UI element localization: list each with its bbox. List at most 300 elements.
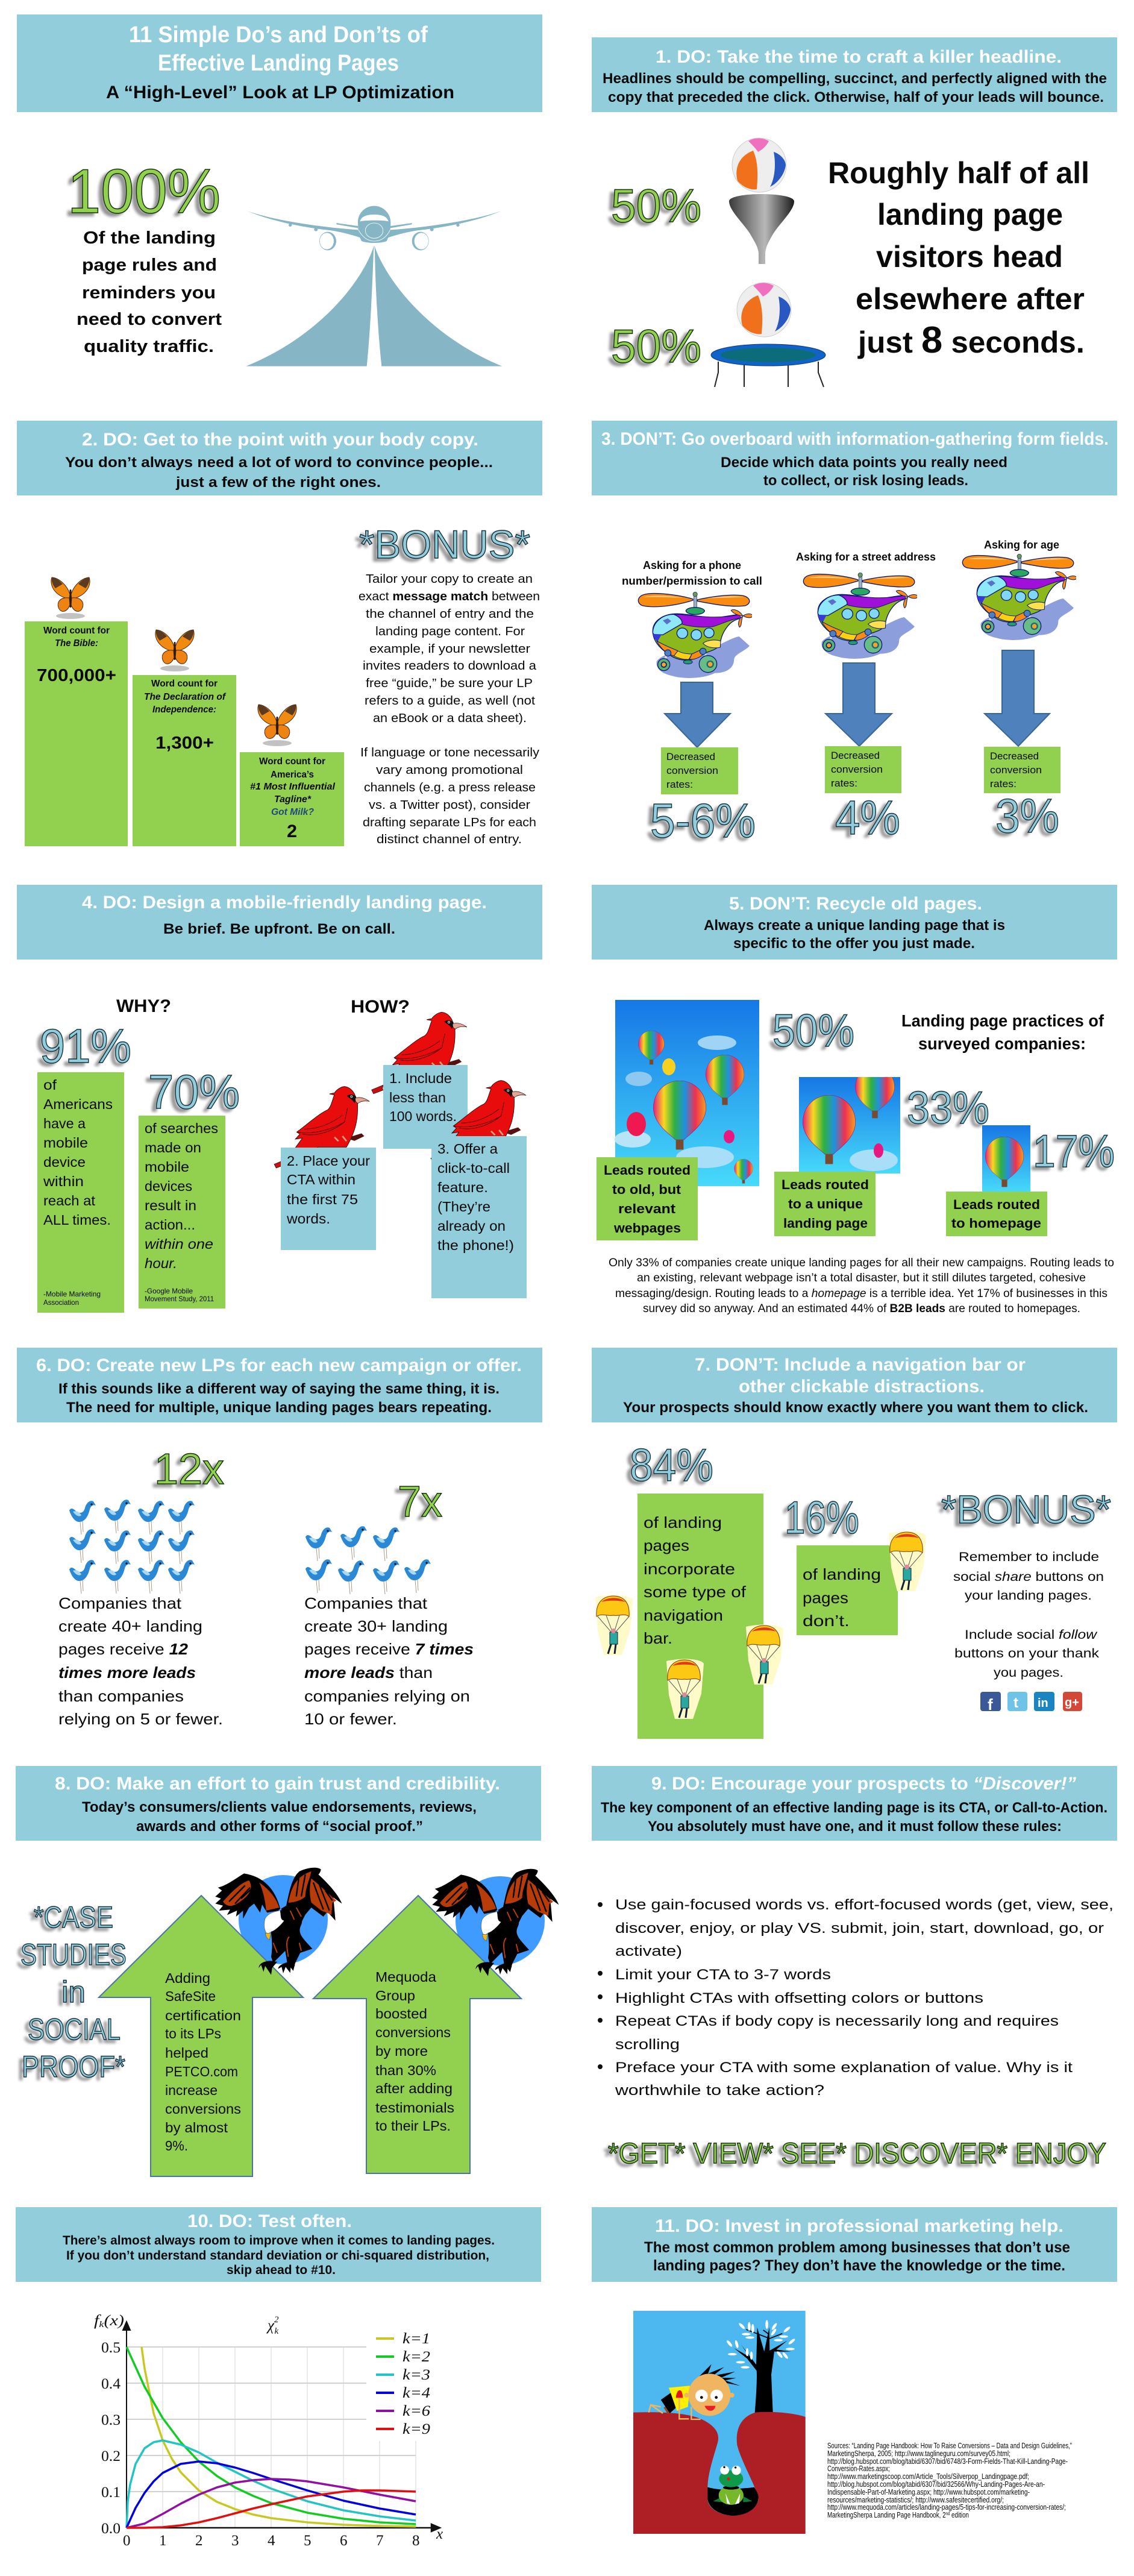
- arrow card: SafeSite: certification: [165, 2008, 241, 2023]
- bonus text: [953, 1550, 1104, 1680]
- line chart: chi-squared distribution: 8: [412, 2533, 419, 2549]
- arrow card: SafeSite: Adding: [165, 1970, 210, 1986]
- tip 2 card: CTA within: [287, 1172, 356, 1187]
- sources text: nd: [946, 2511, 950, 2516]
- heading: specific to the offer you just made.: [733, 935, 975, 952]
- intro text: quality traffic.: [84, 337, 214, 356]
- heading: [16, 1766, 541, 1841]
- bar: tagline: [240, 752, 344, 846]
- heading: The most common problem among businesses that don’t use: [644, 2239, 1070, 2256]
- column: age: rates:: [990, 778, 1017, 790]
- label: old pages: to old, but: [612, 1182, 681, 1197]
- card: 16%: don’t.: [803, 1612, 850, 1630]
- card: 84%: incorporate: [644, 1560, 735, 1578]
- icons: social buttons: [980, 1692, 1082, 1714]
- column: age: Asking for age: [984, 539, 1059, 551]
- line chart: chi-squared distribution: 3: [231, 2533, 239, 2549]
- label: homepage: [946, 1192, 1047, 1236]
- icon: cardinal 2: [274, 1087, 369, 1168]
- heading: 8. DO: Make an effort to gain trust and credibility.: [55, 1774, 500, 1794]
- heading: Today’s consumers/clients value endorsements, reviews,: [82, 1799, 477, 1815]
- card: 91% of Americans: within: [43, 1173, 84, 1189]
- bar: Declaration of Independence: Word count for: [151, 679, 218, 689]
- column: phone: [622, 559, 762, 847]
- heading: Decide which data points you really need: [721, 454, 1007, 471]
- bonus text: exact message match between: [359, 590, 540, 603]
- arrow card: Mequoda: to their LPs.: [375, 2118, 451, 2134]
- case studies heading: in: [61, 1975, 86, 2009]
- CTA rules list: Preface your CTA with some explanation of value. Why is it: [615, 2059, 1073, 2076]
- icon: cardinal 1: [372, 1012, 467, 1094]
- heading: [16, 2207, 541, 2282]
- panel: 10. test often: [16, 2207, 541, 2549]
- heading: If this sounds like a different way of saying the same thing, it is.: [58, 1381, 500, 1397]
- label: old pages: [597, 1157, 698, 1240]
- line chart: chi-squared distribution: k=1: [403, 2331, 430, 2347]
- bonus text: If language or tone necessarily: [360, 746, 539, 759]
- tip 3 card: the phone!): [437, 1237, 514, 1253]
- bar: The Bible: [25, 621, 128, 846]
- panel: 7. navigation bar: [592, 1348, 1117, 1739]
- card: 91% of Americans: -Mobile Marketing: [43, 1290, 101, 1298]
- bonus text: social share buttons on: [953, 1570, 1104, 1584]
- text: 30+ landing pages: Companies that: [304, 1594, 428, 1612]
- bonus text: your landing pages.: [965, 1589, 1092, 1603]
- tip 3 card: feature.: [437, 1180, 488, 1195]
- heading: 1. DO: Take the time to craft a killer headline.: [656, 47, 1062, 67]
- arrow card: Mequoda: testimonials: [375, 2100, 454, 2116]
- arrow card: Mequoda: after adding: [375, 2081, 453, 2096]
- bonus text: an eBook or a data sheet).: [373, 712, 527, 725]
- heading: You absolutely must have one, and it must follow these rules:: [648, 1818, 1062, 1835]
- line chart: chi-squared distribution: 0: [123, 2533, 130, 2549]
- bonus text: buttons on your thank: [954, 1647, 1100, 1660]
- tip 2 card: [281, 1148, 376, 1250]
- heading: Be brief. Be upfront. Be on call.: [163, 921, 395, 937]
- column: age: Decreased: [990, 750, 1039, 762]
- bonus heading: *BONUS*: [359, 522, 530, 567]
- card: 70% of searches: within one: [145, 1236, 213, 1252]
- stat: 50%: 50%: [772, 1005, 854, 1057]
- label: unique page: Leads routed: [782, 1177, 869, 1192]
- intro text: Of the landing: [83, 228, 216, 248]
- heading: 10. DO: Test often.: [187, 2211, 352, 2231]
- arrow card: SafeSite: PETCO.com: [165, 2064, 238, 2079]
- title banner: 11 Simple Do’s and Don’ts of: [129, 22, 428, 48]
- arrow card: SafeSite: 9%.: [165, 2138, 188, 2153]
- text: 40+ landing pages: relying on 5 or fewer.: [58, 1710, 223, 1728]
- heading: Headlines should be compelling, succinct, and perfectly aligned with the: [603, 71, 1107, 87]
- text: 40+ landing pages: [58, 1594, 223, 1728]
- bar: tagline: Word count for: [259, 756, 325, 767]
- line chart: chi-squared distribution: k=4: [403, 2385, 430, 2401]
- image: balloons medium: [799, 1067, 900, 1173]
- arrow card: Mequoda: conversions: [375, 2025, 451, 2040]
- intro text: reminders you: [82, 283, 216, 303]
- text: 30+ landing pages: create 30+ landing: [304, 1617, 448, 1635]
- icon: butterflies: [51, 577, 296, 746]
- panel: 1. killer headline: [592, 37, 1117, 387]
- icons: social buttons: g+: [1065, 1696, 1079, 1709]
- sources text: Indispensable-Part-of-Marketing.aspx; http://www.hubspot.com/marketing-: [827, 2487, 1030, 2496]
- sources text: edition: [950, 2510, 969, 2519]
- arrow card: Mequoda: by more: [375, 2043, 428, 2059]
- case studies heading: PROOF*: [22, 2050, 125, 2084]
- bonus text: landing page content. For: [375, 625, 525, 638]
- bar: tagline: Got Milk?: [271, 807, 314, 817]
- icon: parachutes: [595, 1531, 926, 1719]
- heading: The key component of an effective landing page is its CTA, or Call-to-Action.: [601, 1800, 1107, 1816]
- panel: 11. professional help: [592, 2207, 1117, 2534]
- column: street address: rates:: [831, 778, 857, 789]
- heading: The need for multiple, unique landing pages bears repeating.: [66, 1400, 492, 1416]
- heading: [592, 37, 1117, 112]
- bar: The Bible: Word count for: [43, 626, 110, 636]
- card: 70% of searches: mobile: [145, 1159, 189, 1175]
- text: 30+ landing pages: companies relying on: [304, 1687, 470, 1705]
- image: balloons small: [982, 1125, 1030, 1192]
- line chart: chi-squared distribution: 5: [304, 2533, 311, 2549]
- bar: Declaration of Independence: [133, 675, 236, 846]
- card: 84%: [637, 1494, 763, 1739]
- label: unique page: to a unique: [788, 1196, 863, 1211]
- line chart: chi-squared distribution: k=9: [403, 2421, 431, 2437]
- heading: just a few of the right ones.: [175, 474, 381, 491]
- stat: 84%: 84%: [630, 1440, 713, 1491]
- panel: title and 100% intro: [17, 14, 542, 366]
- bar: Declaration of Independence: Independence:: [152, 705, 216, 715]
- text: 40+ landing pages: create 40+ landing: [58, 1617, 202, 1635]
- column: phone: Decreased: [666, 751, 715, 762]
- bonus text: free “guide,” be sure your LP: [366, 677, 533, 690]
- column: street address: Asking for a street address: [796, 551, 936, 563]
- line chart: chi-squared distribution: 4: [268, 2533, 275, 2549]
- label: homepage: to homepage: [951, 1216, 1041, 1231]
- label: old pages: webpages: [613, 1220, 681, 1236]
- column: street address: [796, 551, 936, 844]
- arrow card: SafeSite: SafeSite: [165, 1988, 216, 2004]
- bounce statement: landing page: [877, 198, 1063, 231]
- panel: 2. body copy: [17, 421, 542, 846]
- icon: eagle 1: [215, 1868, 342, 1975]
- bonus text: distinct channel of entry.: [377, 833, 522, 846]
- card: 16%: [797, 1545, 898, 1635]
- heading: to collect, or risk losing leads.: [763, 473, 968, 489]
- card: 91% of Americans: Americans: [43, 1096, 113, 1112]
- title banner: [17, 14, 542, 112]
- explanation paragraph: messaging/design. Routing leads to a homepage is a terrible idea. Yet 17% of businesses in this: [615, 1287, 1107, 1300]
- label: homepage: Leads routed: [953, 1197, 1040, 1212]
- CTA rules list: worthwhile to take action?: [615, 2082, 824, 2099]
- sources text: http://blog.hubspot.com/blog/tabid/6307/bid/32566/Why-Landing-Pages-Are-an-: [827, 2480, 1045, 2489]
- icon: airplane over runway: [246, 206, 502, 366]
- sources text: http://blog.hubspot.com/blog/tabid/6307/bid/6748/3-Form-Fields-That-Kill-Landing-Page-: [827, 2457, 1068, 2466]
- column: phone: Asking for a phone: [643, 559, 741, 571]
- bonus text: example, if your newsletter: [369, 642, 530, 656]
- line chart: chi-squared distribution: k=6: [403, 2403, 431, 2419]
- icon group: 12 birds: [69, 1500, 195, 1594]
- tip 2 card: the first 75: [287, 1192, 358, 1207]
- stat: 50% funnel: 50%: [611, 179, 701, 232]
- line chart: chi-squared distribution: 0.0: [101, 2521, 121, 2537]
- line chart: chi-squared distribution: (x): [104, 2313, 124, 2329]
- icon group: 7 birds: [305, 1526, 431, 1594]
- bonus text: Remember to include: [959, 1550, 1099, 1564]
- column: phone: rates:: [666, 779, 693, 790]
- sources text: [827, 2441, 1072, 2519]
- line chart: chi-squared distribution: 0.4: [101, 2376, 121, 2392]
- heading: [592, 1348, 1117, 1422]
- tip 2 card: 2. Place your: [287, 1153, 370, 1169]
- icons: social buttons: in: [1038, 1697, 1048, 1710]
- sources text: resources/marketing-statistics/; http://www.safesitecertified.org/;: [827, 2495, 1004, 2504]
- line chart: chi-squared distribution: 6: [340, 2533, 347, 2549]
- CTA rules list: discover, enjoy, or play VS. submit, join, start, download, go, or: [615, 1920, 1104, 1937]
- tip 3 card: (They’re: [437, 1199, 490, 1214]
- heading: There’s almost always room to improve when it comes to landing pages.: [63, 2234, 495, 2248]
- panel: 3. form fields: [592, 421, 1117, 847]
- heading: awards and other forms of “social proof.”: [136, 1818, 423, 1835]
- stat: 100%: 100%: [67, 157, 221, 227]
- stat: 50% trampoline: 50%: [611, 319, 701, 372]
- tip 3 card: [431, 1136, 527, 1298]
- heading: landing pages? They don’t have the knowledge or the time.: [653, 2257, 1065, 2274]
- heading: copy that preceded the click. Otherwise, half of your leads will bounce.: [608, 89, 1104, 105]
- column: street address: Decreased: [831, 750, 880, 761]
- card: 16%: pages: [803, 1589, 848, 1607]
- stat: 7x: 7x: [398, 1478, 442, 1526]
- heading: You don’t always need a lot of word to convince people...: [65, 454, 493, 471]
- column: age: [962, 539, 1077, 843]
- line chart: chi-squared distribution: 2: [195, 2533, 202, 2549]
- CTA rules list: Limit your CTA to 3-7 words: [615, 1967, 831, 1983]
- bounce statement: visitors head: [876, 240, 1063, 274]
- arrow card: Mequoda: [313, 1896, 521, 2173]
- icon: beach ball over trampoline: [711, 283, 825, 387]
- arrow card: SafeSite: increase: [165, 2082, 218, 2098]
- intro text: page rules and: [82, 256, 217, 275]
- column: phone: conversion: [666, 765, 718, 776]
- card: 70% of searches: result in: [145, 1198, 196, 1213]
- arrow card: SafeSite: helped: [165, 2045, 208, 2061]
- bonus text: vary among promotional: [376, 764, 523, 777]
- label: old pages: relevant: [618, 1201, 676, 1216]
- label: unique page: landing page: [783, 1216, 868, 1231]
- stat: 70%: 70%: [148, 1065, 240, 1119]
- card: 70% of searches: made on: [145, 1140, 201, 1155]
- tip 1 card: less than: [389, 1090, 446, 1105]
- card: 91% of Americans: [37, 1072, 124, 1313]
- bonus text: invites readers to download a: [363, 659, 537, 673]
- bar: Declaration of Independence: The Declaration of: [144, 692, 227, 702]
- bonus text: drafting separate LPs for each: [363, 816, 536, 829]
- card: 70% of searches: [139, 1116, 225, 1308]
- tip 1 card: [383, 1065, 468, 1149]
- line chart: chi-squared distribution: k: [275, 2326, 278, 2336]
- column: phone: number/permission to call: [622, 575, 762, 587]
- arrow card: SafeSite: conversions: [165, 2101, 241, 2117]
- sources text: MarketingSherpa, 2005; http://www.taglineguru.com/survey05.html;: [827, 2449, 1010, 2458]
- case studies heading: [20, 1900, 127, 2084]
- CTA rules list: Use gain-focused words vs. effort-focused words (get, view, see,: [615, 1897, 1114, 1913]
- backdrop circles: [239, 1875, 545, 1965]
- case studies heading: *CASE: [34, 1900, 113, 1934]
- bonus text: Include social follow: [965, 1628, 1098, 1642]
- card: 91% of Americans: mobile: [43, 1135, 88, 1151]
- card: 91% of Americans: reach at: [43, 1193, 96, 1208]
- sources text: http://www.mequoda.com/articles/landing-pages/5-tips-for-increasing-conversion-rates/;: [827, 2502, 1066, 2512]
- card: 16%: of landing: [803, 1565, 881, 1583]
- icons: social buttons: f: [988, 1695, 993, 1714]
- label: unique page: [774, 1172, 876, 1236]
- text: 30+ landing pages: pages receive 7 times: [304, 1640, 474, 1658]
- explanation paragraph: [609, 1257, 1114, 1315]
- stat: 91%: 91%: [40, 1019, 131, 1073]
- explanation paragraph: an existing, relevant webpage isn’t a total disaster, but it still dilutes targeted, cohesive: [637, 1272, 1086, 1284]
- tip 1 card: 100 words.: [389, 1108, 457, 1124]
- line chart: chi-squared distribution: 0.1: [101, 2484, 121, 2501]
- bounce statement: Roughly half of all: [828, 156, 1089, 190]
- tip 3 card: click-to-call: [437, 1160, 510, 1176]
- heading: 11. DO: Invest in professional marketing help.: [655, 2216, 1064, 2236]
- column: street address: conversion: [831, 764, 883, 775]
- bar: The Bible: The Bible:: [55, 638, 98, 649]
- heading: [17, 421, 542, 495]
- icons: social buttons: t: [1013, 1695, 1018, 1711]
- text: 30+ landing pages: 10 or fewer.: [304, 1710, 397, 1728]
- survey title: surveyed companies:: [918, 1034, 1086, 1053]
- explanation paragraph: survey did so anyway. And an estimated 44% of B2B leads are routed to homepages.: [643, 1302, 1080, 1315]
- heading: 5. DON’T: Recycle old pages.: [729, 894, 982, 914]
- arrow card: Mequoda: Group: [375, 1988, 415, 2003]
- line chart: chi-squared distribution: 2: [274, 2315, 279, 2325]
- bounce statement: [828, 156, 1089, 361]
- case studies heading: STUDIES: [20, 1938, 127, 1971]
- line chart: chi-squared distribution: 7: [376, 2533, 383, 2549]
- panel: 5. recycle old pages: [592, 885, 1117, 1315]
- arrow card: Mequoda: boosted: [375, 2006, 427, 2022]
- heading: If you don’t understand standard deviation or chi-squared distribution,: [66, 2249, 489, 2263]
- line chart: chi-squared distribution: f: [94, 2313, 98, 2329]
- text: 40+ landing pages: Companies that: [58, 1594, 182, 1612]
- heading: 4. DO: Design a mobile-friendly landing page.: [82, 893, 487, 913]
- line chart: chi-squared distribution: 1: [159, 2533, 166, 2549]
- card: 70% of searches: hour.: [145, 1255, 177, 1271]
- sources text: Conversion-Rates.aspx;: [827, 2464, 890, 2473]
- panel: 8. trust and credibility: [16, 1766, 559, 2176]
- panel: 9. discover: [592, 1766, 1117, 2170]
- heading: 6. DO: Create new LPs for each new campaign or offer.: [36, 1356, 522, 1375]
- tip 3 card: already on: [437, 1218, 506, 1234]
- WHY column label: WHY?: [116, 996, 171, 1016]
- heading: [17, 885, 542, 960]
- card: 84%: navigation: [644, 1606, 723, 1624]
- CTA rules list: scrolling: [615, 2037, 680, 2053]
- heading: 7. DON’T: Include a navigation bar or: [695, 1355, 1026, 1375]
- heading: [17, 1348, 542, 1422]
- heading: Your prospects should know exactly where you want them to click.: [623, 1400, 1088, 1416]
- bonus text: the channel of entry and the: [366, 608, 534, 621]
- heading: [592, 2207, 1117, 2282]
- column: phone: 5-6%: [650, 794, 756, 847]
- icon: eagle 2: [432, 1869, 559, 1976]
- CTA rules list: Repeat CTAs if body copy is necessarily long and requires: [615, 2013, 1059, 2029]
- survey title: Landing page practices of: [901, 1011, 1104, 1030]
- arrow card: Mequoda: than 30%: [375, 2062, 436, 2078]
- card: 70% of searches: devices: [145, 1178, 192, 1194]
- label: old pages: Leads routed: [604, 1163, 691, 1178]
- image: balloons large: [615, 1000, 759, 1186]
- line chart: chi-squared distribution: [94, 2313, 443, 2549]
- card: 91% of Americans: device: [43, 1154, 86, 1170]
- illustration: boy and frog: [633, 2311, 806, 2534]
- intro text: [77, 228, 222, 356]
- card: 91% of Americans: ALL times.: [43, 1212, 111, 1228]
- text: 30+ landing pages: [304, 1594, 474, 1728]
- tip 3 card: 3. Offer a: [437, 1141, 498, 1157]
- bonus text: channels (e.g. a press release: [364, 781, 536, 794]
- column: age: conversion: [990, 764, 1042, 776]
- heading: [592, 1766, 1117, 1841]
- bounce statement: elsewhere after: [856, 282, 1085, 316]
- title banner: Effective Landing Pages: [158, 51, 399, 76]
- stat: 16%: 16%: [785, 1492, 859, 1544]
- stat: 17%: 17%: [1033, 1126, 1115, 1177]
- bonus heading: *BONUS*: [941, 1487, 1111, 1531]
- column: age: 3%: [995, 789, 1059, 843]
- bar: tagline: America’s: [271, 770, 314, 780]
- sources text: MarketingSherpa Landing Page Handbook, 2: [827, 2510, 984, 2519]
- card: 84%: some type of: [644, 1583, 747, 1601]
- line chart: chi-squared distribution: x: [436, 2526, 443, 2542]
- heading: [592, 885, 1117, 960]
- CTA rules list: [598, 1897, 1114, 2099]
- title banner: A “High-Level” Look at LP Optimization: [106, 83, 454, 102]
- tip 1 card: 1. Include: [389, 1070, 452, 1086]
- card: 70% of searches: Movement Study, 2011: [145, 1295, 214, 1303]
- bar: tagline: Tagline*: [274, 794, 312, 805]
- bonus text: [359, 573, 540, 846]
- panel: 4. mobile-friendly: [17, 885, 542, 1313]
- card: 84%: of landing: [644, 1513, 722, 1531]
- line chart: chi-squared distribution: 0.3: [101, 2412, 121, 2428]
- explanation paragraph: Only 33% of companies create unique landing pages for all their new campaigns. Routing leads to: [609, 1257, 1114, 1269]
- CTA rules list: activate): [615, 1943, 682, 1959]
- text: 40+ landing pages: pages receive 12: [58, 1640, 189, 1658]
- case studies heading: SOCIAL: [28, 2012, 121, 2046]
- heading: 2. DO: Get to the point with your body copy.: [82, 430, 478, 450]
- bar: tagline: 2: [287, 821, 297, 841]
- bonus text: refers to a guide, as well (not: [365, 694, 535, 708]
- line chart: chi-squared distribution: 0.5: [101, 2340, 121, 2356]
- line chart: chi-squared distribution: k: [99, 2320, 104, 2329]
- panel: 6. new LPs: [17, 1348, 542, 1728]
- heading: skip ahead to #10.: [227, 2263, 336, 2277]
- card: 70% of searches: of searches: [145, 1120, 218, 1136]
- card: 70% of searches: action...: [145, 1217, 195, 1233]
- card: 70% of searches: -Google Mobile: [145, 1287, 193, 1295]
- bounce statement: just 8 seconds.: [857, 319, 1085, 361]
- HOW column label: HOW?: [351, 997, 410, 1017]
- icon: beach ball over funnel: [729, 138, 794, 264]
- line chart: chi-squared distribution: k=2: [403, 2349, 430, 2365]
- bonus text: Tailor your copy to create an: [366, 573, 533, 586]
- text: 30+ landing pages: more leads than: [304, 1663, 433, 1682]
- icon: cardinal 3: [431, 1081, 526, 1162]
- CTA rules list: Highlight CTAs with offsetting colors or buttons: [615, 1990, 983, 2006]
- stat: 12x: 12x: [154, 1445, 224, 1494]
- heading: 9. DO: Encourage your prospects to “Discover!”: [651, 1774, 1076, 1794]
